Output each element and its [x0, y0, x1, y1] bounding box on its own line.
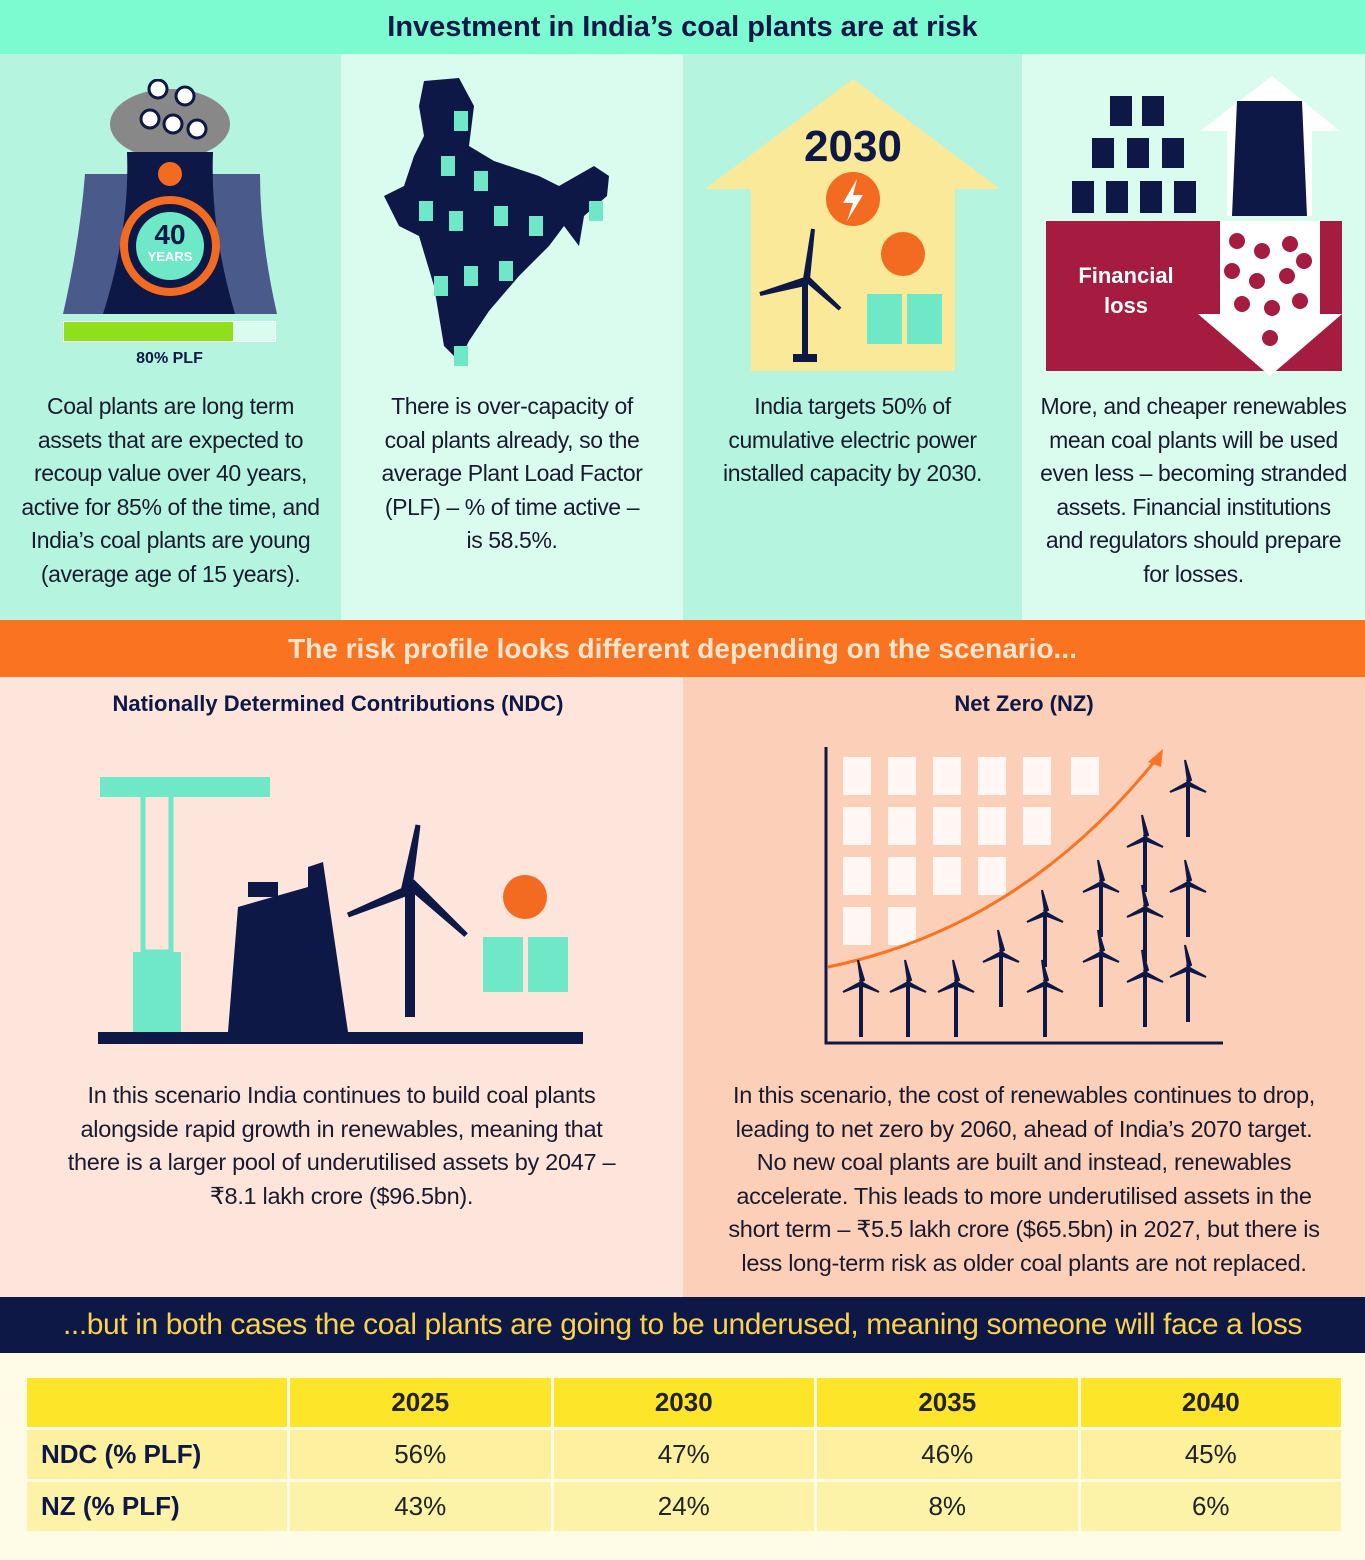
text: panel 1: active for 85% of the time, and	[21, 494, 320, 520]
navy banner	[0, 1297, 1365, 1353]
text: panel 2: coal plants already, so the	[385, 426, 639, 452]
text: panel 2: There is over-capacity of	[391, 393, 633, 419]
table: PLF by scenario: 6%	[1192, 1491, 1230, 1521]
panel: long term assets	[0, 54, 341, 620]
panel: over-capacity	[341, 54, 683, 620]
icon: house arrow with renewables: 2030	[804, 122, 902, 171]
icon: house arrow with renewables	[705, 79, 1000, 371]
table: PLF by scenario: 8%	[928, 1491, 966, 1521]
orange banner	[0, 620, 1365, 677]
icon: cooling tower with 40 years: YEARS	[148, 249, 193, 264]
table: PLF by scenario: 24%	[658, 1491, 710, 1521]
icon: financial loss: Financial	[1078, 263, 1174, 288]
text: panel 1: assets that are expected to	[38, 426, 303, 452]
heading: NZ: Net Zero (NZ)	[954, 691, 1094, 716]
text: panel 2: is 58.5%.	[466, 527, 558, 553]
title bar: Investment in India’s coal plants are at risk	[387, 11, 978, 43]
text: panel 2: (PLF) – % of time active –	[385, 494, 639, 520]
table: PLF by scenario: 2035	[918, 1387, 976, 1417]
navy banner: ...but in both cases the coal plants are going to be underused, meaning someone will face a loss	[63, 1308, 1302, 1341]
text: NZ	[728, 1082, 1320, 1276]
text: NDC: alongside rapid growth in renewables, meaning that	[81, 1116, 602, 1142]
chart: plants to wind	[824, 747, 1223, 1044]
text: NZ: In this scenario, the cost of renewables continues to drop,	[733, 1082, 1315, 1108]
title bar	[0, 0, 1365, 54]
icon: cooling tower with 40 years	[63, 79, 277, 314]
icon: crane coal plant and renewables	[98, 777, 583, 1044]
text: NZ: No new coal plants are built and instead, renewables	[757, 1149, 1291, 1175]
table: PLF by scenario: NDC (% PLF)	[41, 1439, 201, 1469]
text: NDC: ₹8.1 lakh crore ($96.5bn).	[210, 1182, 473, 1208]
text: NDC: there is a larger pool of underutilised assets by 2047 –	[68, 1149, 615, 1175]
text: panel 3: installed capacity by 2030.	[723, 460, 982, 486]
panel: Net Zero	[683, 677, 1365, 1297]
table: PLF by scenario: 2030	[655, 1387, 713, 1417]
text: NZ: accelerate. This leads to more underutilised assets in the	[736, 1182, 1312, 1208]
text: panel 4: mean coal plants will be used	[1049, 426, 1338, 452]
text: panel 3: India targets 50% of	[754, 393, 951, 419]
text: panel 3: cumulative electric power	[728, 426, 977, 452]
text: NZ: leading to net zero by 2060, ahead of India’s 2070 target.	[736, 1116, 1312, 1142]
heading: NDC: Nationally Determined Contributions (NDC)	[112, 691, 564, 716]
panel: 2030 target	[683, 54, 1022, 620]
text: panel 4	[1040, 393, 1347, 586]
text: NZ: less long-term risk as older coal plants are not replaced.	[741, 1250, 1307, 1276]
text: panel 3	[723, 393, 982, 486]
table: PLF by scenario: 56%	[394, 1439, 446, 1469]
text: panel 2: average Plant Load Factor	[381, 460, 643, 486]
icon: financial loss	[1046, 76, 1342, 376]
table: PLF by scenario	[27, 1378, 1341, 1531]
icon: India map	[384, 78, 609, 366]
table: PLF by scenario: 2025	[391, 1387, 449, 1417]
orange banner: The risk profile looks different depending on the scenario...	[288, 633, 1077, 664]
table: PLF by scenario: NZ (% PLF)	[41, 1491, 180, 1521]
label 80% PLF: 80% PLF	[136, 350, 203, 367]
text: NDC: In this scenario India continues to build coal plants	[88, 1082, 595, 1108]
panel: financial loss	[1022, 54, 1365, 620]
table: PLF by scenario: 45%	[1185, 1439, 1237, 1469]
text: panel 1: Coal plants are long term	[47, 393, 294, 419]
text: panel 1	[21, 393, 320, 587]
panel: NDC	[0, 677, 683, 1297]
icon: financial loss: loss	[1104, 293, 1148, 318]
table: PLF by scenario: 2040	[1182, 1387, 1240, 1417]
table: PLF by scenario: 47%	[658, 1439, 710, 1469]
text: panel 4: and regulators should prepare	[1046, 527, 1341, 553]
text: panel 4: More, and cheaper renewables	[1041, 393, 1346, 419]
table: PLF by scenario: 43%	[394, 1491, 446, 1521]
text: panel 1: (average age of 15 years).	[41, 560, 300, 586]
text: panel 1: India’s coal plants are young	[31, 527, 310, 553]
PLF bar	[63, 321, 276, 342]
table: PLF by scenario: 46%	[921, 1439, 973, 1469]
text: panel 4: assets. Financial institutions	[1056, 494, 1331, 520]
text: panel 4: for losses.	[1143, 560, 1244, 586]
icon: cooling tower with 40 years: 40	[154, 219, 186, 250]
text: panel 1: recoup value over 40 years,	[34, 460, 307, 486]
text: panel 2	[381, 393, 643, 553]
text: NZ: short term – ₹5.5 lakh crore ($65.5bn) in 2027, but there is	[728, 1216, 1320, 1242]
text: NDC	[68, 1082, 616, 1209]
text: panel 4: even less – becoming stranded	[1040, 460, 1347, 486]
